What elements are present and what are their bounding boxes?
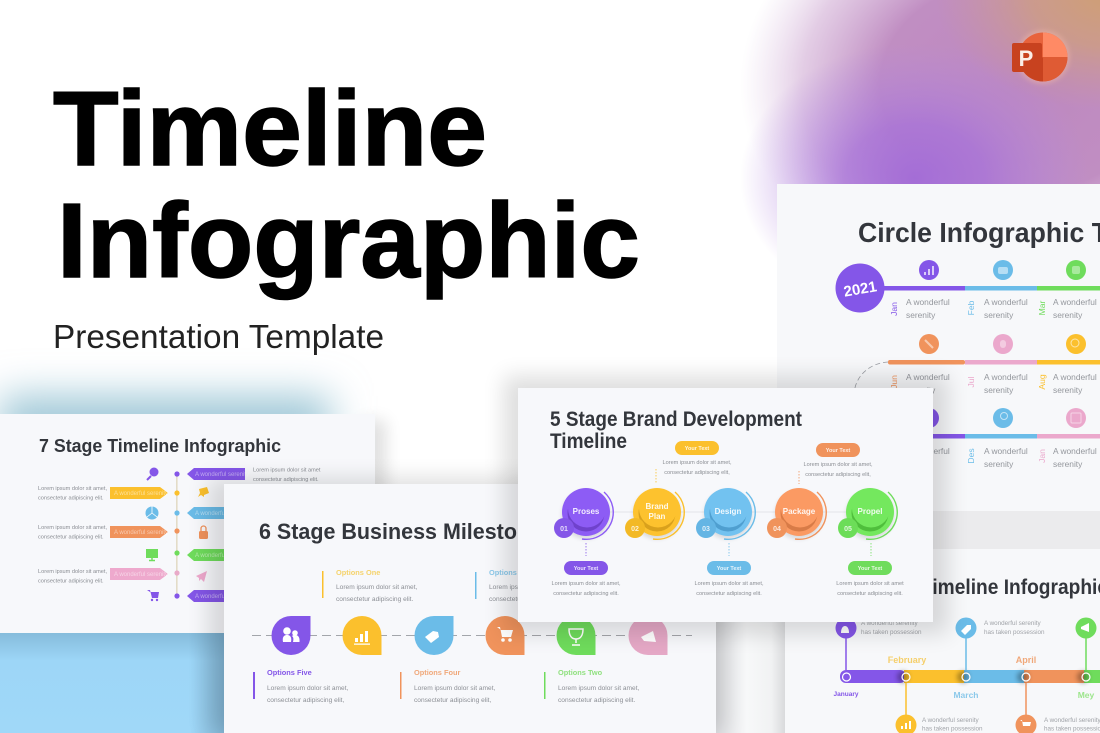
milestone captions: has taken possession [984,629,1045,636]
lower options [253,668,640,704]
row one timeline: A wonderful [906,297,950,307]
row two timeline: A wonderful [984,372,1028,382]
stage: Design [696,488,755,539]
stage: Brand Plan: Plan [649,512,666,521]
body copy: Lorem ipsum dolor sit amet [253,468,321,474]
row two timeline: Jun [889,375,899,389]
row two timeline: serenity [1053,385,1083,395]
stage: Proses [554,488,613,539]
dotted connectors [586,469,871,556]
body copy [551,460,904,597]
milestone stems and markers [836,618,1096,733]
milestone captions: A wonderful serenity [984,620,1042,627]
stage: Package: 04 [773,526,781,533]
upper options: Lorem ipsum dolor sit amet, [489,584,571,591]
row one timeline: serenity [984,310,1014,320]
body copy: Lorem ipsum dolor sit amet, [694,581,764,587]
body copy: Lorem ipsum dolor sit amet [836,581,904,587]
body copy [38,468,321,584]
row three timeline: serenity [984,459,1014,469]
marker icons [283,627,656,645]
row three timeline: A wonderful [1053,446,1097,456]
heading: 5 stage [550,408,802,453]
upper options: consectetur adipiscing elit. [489,596,567,603]
body copy: consectetur adipiscing elit. [553,591,619,597]
upper options [322,568,571,603]
icon: PowerPoint logo: P [1019,46,1033,71]
stage: Brand Plan: 02 [631,526,639,533]
row two timeline: Jul [966,376,976,388]
stage icons [146,468,209,601]
heading: 5 stage: 5 Stage Brand Development [550,408,802,431]
stage: Brand Plan: Brand [645,502,669,511]
body copy: Lorem ipsum dolor sit amet, [38,569,107,575]
row three timeline: A wonderful [906,446,950,456]
lower options: consectetur adipiscing elit. [558,697,636,704]
row three timeline: Des [966,448,976,464]
your text pills [564,441,892,575]
arrow labels: A wonderful serenity [114,572,168,578]
body copy: Lorem ipsum dolor sit amet, [803,462,873,468]
panel: 7 stage timeline slide [0,414,386,733]
row three timeline [880,408,1100,469]
milestone captions: has taken possession [861,629,922,636]
row two timeline: Aug [1037,374,1047,390]
your text pills: Your Text [574,566,598,572]
row one timeline: Jan [889,302,899,316]
row two timeline: serenity [906,385,936,395]
upper options: Options Three [489,568,539,577]
panel: circle infographic slide [777,184,1100,511]
title: Timeline [53,70,487,188]
body copy: consectetur adipiscing elit. [38,534,104,540]
icon: PowerPoint logo [1012,30,1070,84]
row two timeline: serenity [984,385,1014,395]
teardrop markers [272,616,668,655]
body copy: consectetur adipiscing elit. [38,578,104,584]
stage: Package: Package [783,507,816,516]
arrow labels: A wonderful [195,553,226,559]
dashed axis [252,634,692,636]
stage: Propel: Propel [858,507,882,516]
panel: timeline infographic slide [785,549,1100,733]
arrow labels: A wonderful serenity [114,530,168,536]
stage: Brand Plan [625,488,684,539]
body copy: Lorem ipsum dolor sit amet, [38,486,107,492]
badge: 2021: 2021 [842,278,878,301]
title [53,70,640,300]
stage: Design: Design [715,507,741,516]
row one timeline: Mar [1037,300,1047,315]
title: Infographic [57,182,640,300]
row one timeline [880,260,1100,320]
stage: Package [767,488,826,539]
stage: Design: 03 [702,526,710,533]
month labels: February [888,655,926,665]
upper options: Options One [336,568,380,577]
milestone captions: A wonderful serenity [922,717,980,724]
body copy: consectetur adipiscing elit. [38,496,104,502]
heading: 7 stage: 7 Stage Timeline Infographic [39,435,281,456]
month labels: January [834,691,859,698]
heading: 5 stage: Timeline [550,430,627,453]
month labels: March [953,690,979,700]
milestone captions: has taken possession [922,726,983,732]
upper options: Lorem ipsum dolor sit amet, [336,584,418,591]
lower options: Lorem ipsum dolor sit amet, [558,685,640,692]
row one timeline: serenity [1053,310,1083,320]
row one timeline: Feb [966,300,976,315]
your text pills: Your Text [685,446,709,452]
body copy: consectetur adipiscing elit. [253,477,319,483]
your text pills: Your Text [717,566,741,572]
arrow labels: A wonderful serenity [114,491,168,497]
connector line [600,511,860,513]
subtitle: Presentation Template [53,318,384,355]
milestone captions [861,620,1100,732]
month labels: Mey [1078,690,1095,700]
lower options: Lorem ipsum dolor sit amet, [267,685,349,692]
row two timeline [854,334,1100,396]
colour bar [840,670,1100,683]
milestone captions: A wonderful serenity [1044,717,1100,724]
row three timeline: serenity [1053,459,1083,469]
lower options: Lorem ipsum dolor sit amet, [414,685,496,692]
panel: 5 stage brand development slide [504,376,948,634]
row two timeline: A wonderful [1053,372,1097,382]
body copy: consectetur adipiscing elit. [837,591,903,597]
row one timeline: A wonderful [1053,297,1097,307]
row three timeline: A wonderful [984,446,1028,456]
heading: 6 stage: 6 Stage Business Milestones [259,519,554,544]
panel: 6 stage business milestones slide [208,478,724,733]
stage: Propel [838,488,897,539]
stage: Proses: Proses [573,507,600,516]
body copy: consectetur adipiscing elit. [696,591,762,597]
body copy: Lorem ipsum dolor sit amet, [38,525,107,531]
lower options: Options Four [414,668,461,677]
body copy: Lorem ipsum dolor sit amet, [551,581,621,587]
your text pills: Your Text [826,448,850,454]
body copy: Lorem ipsum dolor sit amet, [662,460,732,466]
upper options: consectetur adipiscing elit. [336,596,414,603]
arrow labels: A wonderful [195,594,226,600]
row one timeline: A wonderful [984,297,1028,307]
your text pills: Your Text [858,566,882,572]
body copy: consectetur adipiscing elit, [664,470,730,476]
arrow labels: A wonderful [195,511,226,517]
row three timeline: Jan [1037,449,1047,463]
milestone captions: A wonderful serenity [861,620,919,627]
badge: 2021 [836,264,884,312]
stage: Propel: 05 [844,526,852,533]
month labels: April [1016,655,1036,665]
row one timeline: serenity [906,310,936,320]
lower options: Options Two [558,668,603,677]
arrow labels: A wonderful serenity [195,472,249,478]
lower options: consectetur adipiscing elit, [267,697,345,704]
lower options: consectetur adipiscing elit, [414,697,492,704]
month labels [834,655,1095,700]
arrow labels [110,468,249,602]
lower options: Options Five [267,668,312,677]
stage: Proses: 01 [560,526,568,533]
body copy: consectetur adipiscing elit, [805,472,871,478]
vertical axis with dots [174,471,180,599]
row two timeline: A wonderful [906,372,950,382]
